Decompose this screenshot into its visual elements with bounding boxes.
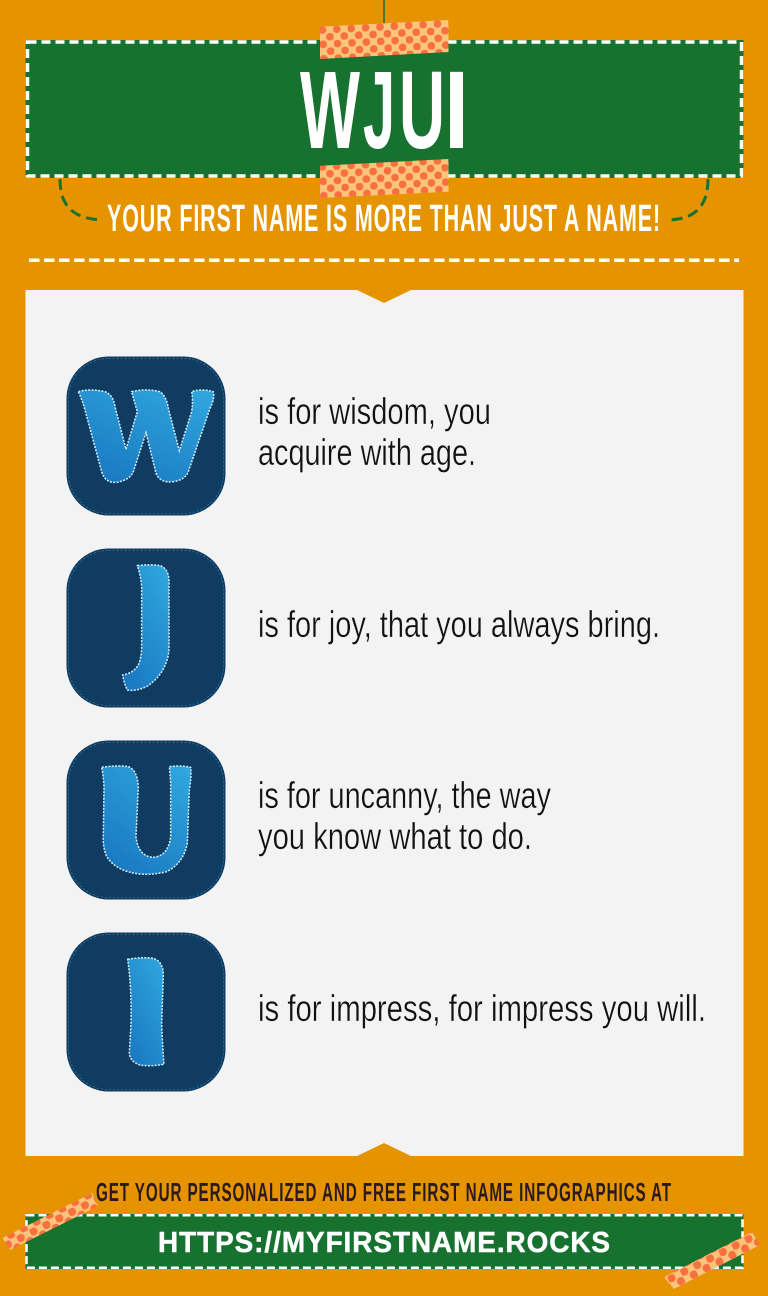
- footer url: HTTPS://MYFIRSTNAME.ROCKS: [158, 1227, 611, 1259]
- text: J: is for joy, that you always bring.: [258, 604, 660, 645]
- top banner: [26, 40, 744, 178]
- tape: footer left: [2, 1193, 98, 1250]
- text: U: you know what to do.: [258, 816, 532, 857]
- text: U: is for uncanny, the way: [258, 775, 551, 816]
- title: [300, 49, 469, 172]
- icon: letter U: [66, 740, 226, 900]
- title: J: [363, 49, 395, 172]
- footer banner: [26, 1214, 744, 1269]
- title: I: [444, 49, 469, 172]
- text: W: is for wisdom, you: [258, 391, 491, 432]
- icon: letter I: [66, 932, 226, 1092]
- text: U: [258, 775, 551, 857]
- panel: letters: [26, 290, 744, 1156]
- title: U: [399, 49, 445, 172]
- tape: banner bottom: [320, 159, 448, 198]
- icon: letter J: [66, 548, 226, 708]
- text: W: acquire with age.: [258, 432, 476, 473]
- tape: footer right: [664, 1232, 760, 1289]
- text: W: [258, 391, 491, 473]
- tape: banner top: [320, 20, 448, 59]
- hanging line: [383, 0, 385, 24]
- divider dashes: [29, 259, 739, 262]
- title: W: [300, 49, 360, 172]
- bracket right: [669, 179, 708, 220]
- bracket left: [60, 179, 103, 220]
- icon: letter W: [66, 356, 226, 516]
